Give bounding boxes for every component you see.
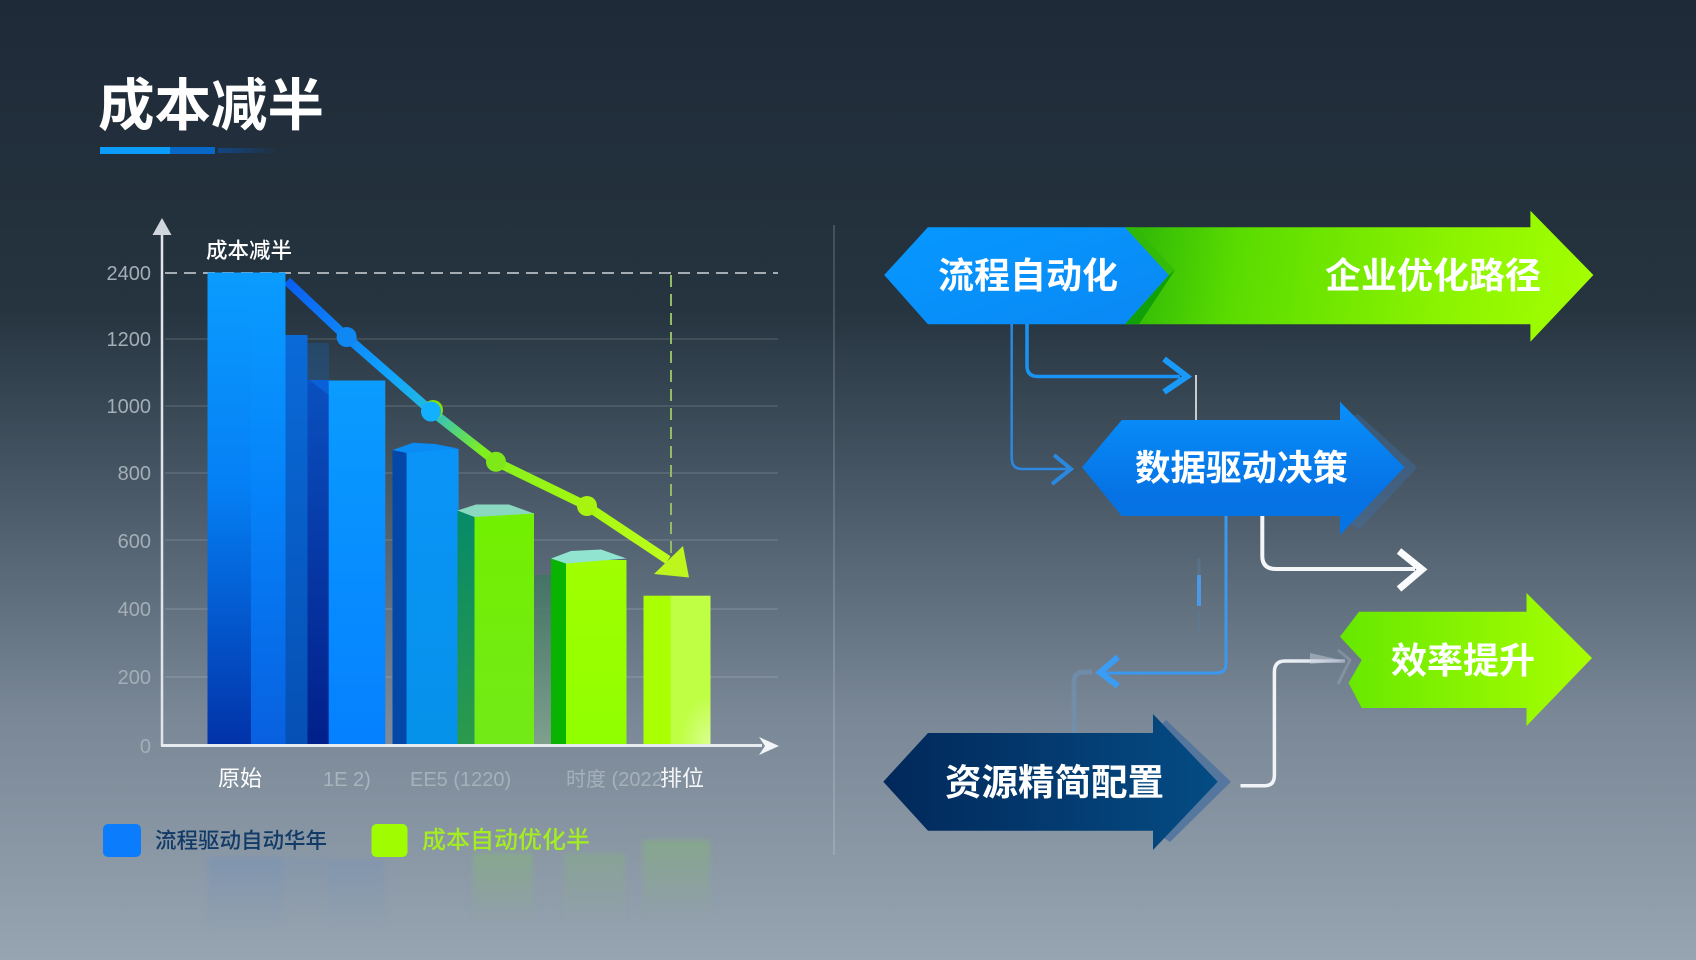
trend markers and arrow head [337,327,689,578]
bar 5 [551,550,626,745]
x axis labels [218,766,704,791]
legend item green [372,824,590,857]
trend line under bars [287,281,668,560]
y axis tick labels: 400 [118,599,151,621]
hexagon: process automation [884,227,1169,324]
arrow: data-driven decisions: 数据驱动决策 [1135,448,1348,488]
hexagon: process automation: 流程自动化 [938,255,1118,296]
x axis labels: 原始 [218,766,262,791]
x axis labels: EE5 (1220) [410,769,511,791]
x axis labels: 时度 (2022 [566,768,663,791]
y axis tick labels: 1000 [106,396,151,418]
bar 6 final [644,596,710,745]
connector: automation to data decisions [1012,324,1071,484]
arrow: resource allocation [883,714,1231,850]
y axis tick labels: 1200 [106,329,151,351]
y axis tick labels: 200 [118,667,151,689]
y axis tick labels: 800 [118,463,151,485]
legend item blue [103,824,327,857]
x axis labels: 排位 [660,766,704,791]
arrow: enterprise optimisation path: 企业优化路径 [1325,255,1541,296]
arrow: data-driven decisions [1082,402,1417,535]
bar chart with axes [106,218,779,791]
bar 2 [309,380,385,745]
y axis tick labels [106,263,151,758]
connector: resources to efficiency [1240,650,1350,786]
legend item blue: 流程驱动自动华年 [155,829,327,853]
connector: gray vertical [1195,375,1197,421]
faint connector from resources [1074,672,1092,733]
top dashed reference line [165,272,778,274]
connector: decisions to white arrow [1262,516,1422,589]
title underline [100,147,280,154]
arrow: efficiency improvement: 效率提升 [1391,640,1535,681]
y axis [152,218,172,746]
connector: decisions to resources [1100,516,1226,686]
arrow: enterprise optimisation path [884,211,1593,342]
callout label above first bar: 成本减半 [206,239,292,263]
legend [103,824,590,857]
arrow: resource allocation: 资源精简配置 [945,762,1164,803]
bar 4 [458,504,552,745]
vertical dashed reference line [670,275,672,560]
y axis tick labels: 2400 [106,263,151,285]
connector: automation to upper arrow [1027,324,1187,392]
bar 1 original [208,272,329,745]
legend item green: 成本自动优化半 [422,827,590,854]
y axis tick labels: 600 [118,531,151,553]
x axis [161,737,779,755]
x axis labels: 1E 2) [323,769,371,791]
dashed blue marker [1198,558,1200,635]
chart reflection [208,840,710,932]
title: 成本减半 [98,74,324,137]
divider [833,225,835,855]
y axis tick labels: 0 [140,736,151,758]
bar 3 [392,443,459,745]
arrow: efficiency improvement [1340,593,1592,726]
